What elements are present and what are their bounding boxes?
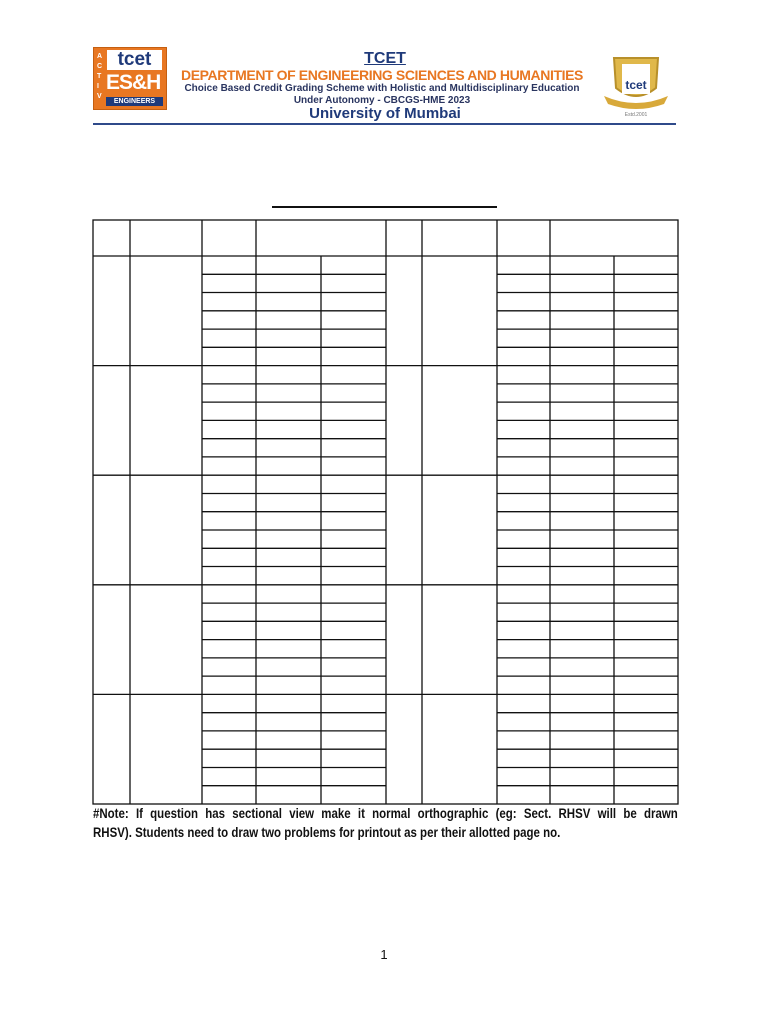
logo: ES&H: C xyxy=(97,63,102,70)
note: RHSV). Students need to draw two problems for printout as per their allotted page no. xyxy=(93,825,560,840)
note: drawn xyxy=(644,806,678,821)
note: (eg: xyxy=(496,806,517,821)
note: question xyxy=(150,806,198,821)
header xyxy=(93,47,676,125)
university: University of Mumbai xyxy=(309,105,461,122)
note: #Note: xyxy=(93,806,129,821)
note: sectional xyxy=(232,806,282,821)
logo: tcet shield: tcet xyxy=(625,78,647,92)
logo: ES&H: ENGINEERS xyxy=(114,98,155,105)
note: make xyxy=(321,806,351,821)
note: RHSV xyxy=(559,806,590,821)
note: view xyxy=(289,806,314,821)
logo: ES&H: A xyxy=(97,53,102,60)
page number: 1 xyxy=(380,947,388,962)
logo: tcet shield xyxy=(604,57,668,116)
department heading: DEPARTMENT OF ENGINEERING SCIENCES AND HUMANITIES xyxy=(181,67,583,83)
logo: ES&H: T xyxy=(97,73,101,80)
note: If xyxy=(136,806,143,821)
logo: ES&H: tcet xyxy=(118,49,151,70)
subtitle lines: Choice Based Credit Grading Scheme with Holistic and Multidisciplinary Education xyxy=(184,83,580,94)
logo: ES&H: I xyxy=(97,83,99,90)
note: it xyxy=(358,806,365,821)
title underline blank xyxy=(272,206,497,208)
logo: ES&H: ES&H xyxy=(106,71,160,94)
logo: ES&H: V xyxy=(97,93,102,100)
title: TCET: TCET xyxy=(364,50,406,67)
note: has xyxy=(205,806,225,821)
note: normal xyxy=(372,806,410,821)
note: will xyxy=(598,806,616,821)
note xyxy=(93,806,678,840)
subtitle lines: Under Autonomy - CBCGS-HME 2023 xyxy=(294,95,470,106)
note: be xyxy=(623,806,637,821)
header rule xyxy=(93,123,676,125)
note: Sect. xyxy=(524,806,551,821)
logo: ES&H xyxy=(93,47,167,110)
subtitle lines xyxy=(184,83,580,106)
note: orthographic xyxy=(418,806,488,821)
